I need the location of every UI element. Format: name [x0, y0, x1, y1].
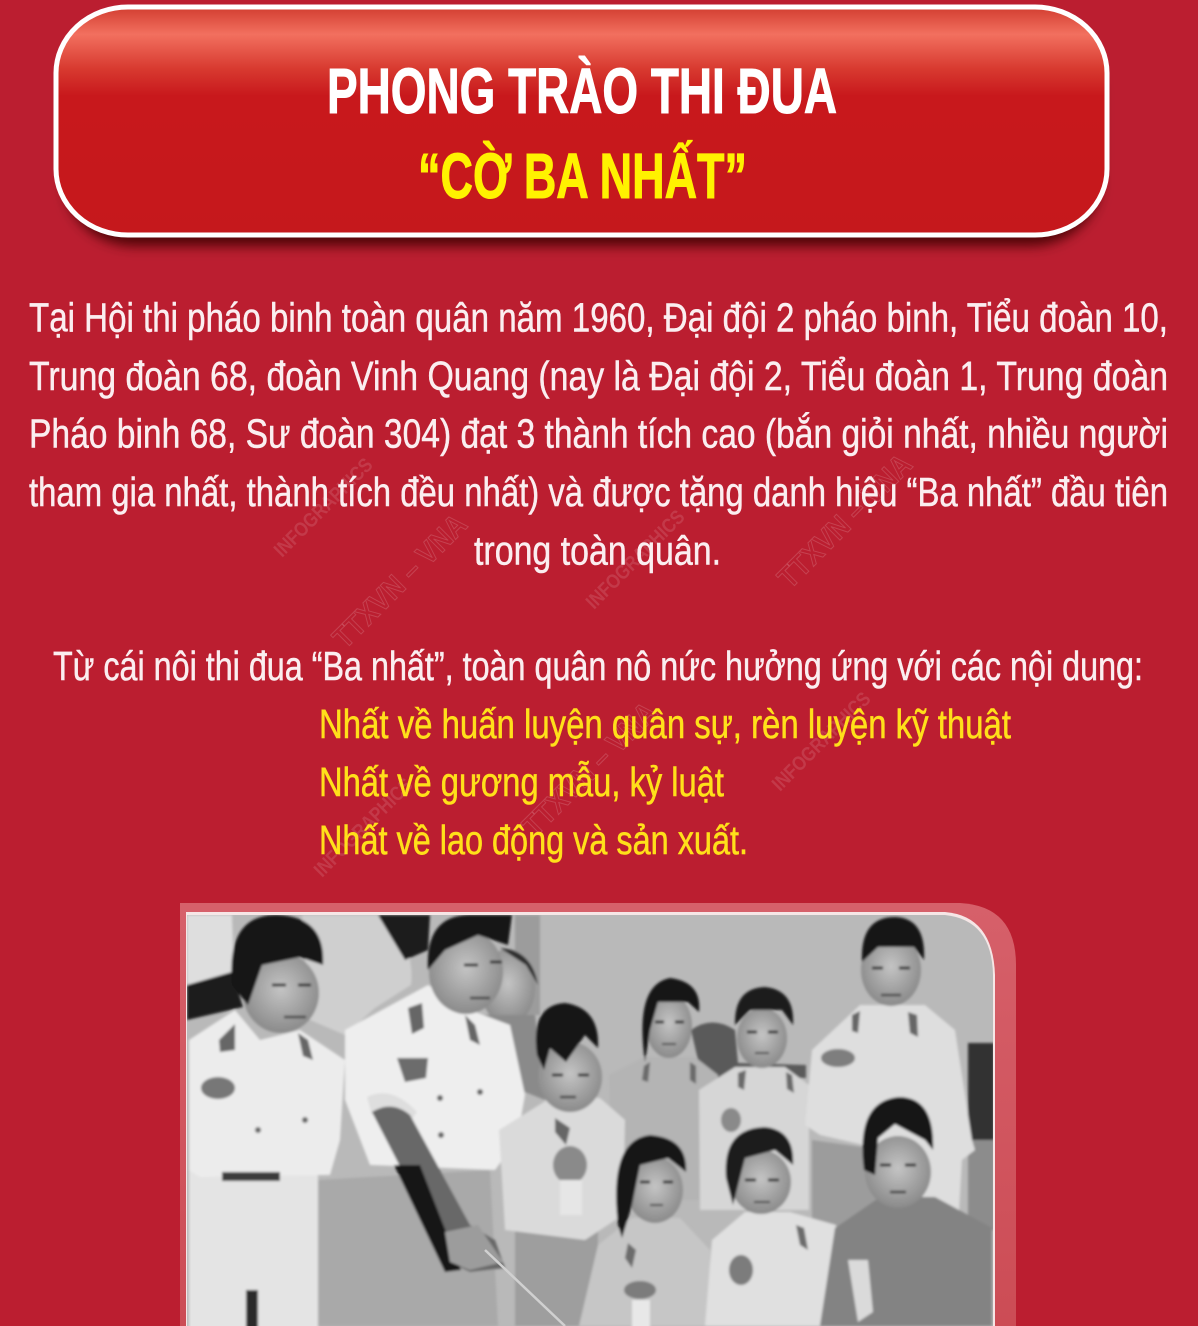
man back row centre	[626, 1054, 720, 1172]
man back row right	[699, 1067, 809, 1210]
yellow list of contents: Nhất về gương mẫu, kỷ luật	[319, 759, 724, 805]
yellow list of contents: Nhất về huấn luyện quân sự, rèn luyện kỹ thuật	[319, 701, 1011, 747]
outlined agency watermarks: TTXVN – VNA	[517, 696, 664, 843]
black and white photo of soldiers	[187, 915, 994, 1326]
watermarks	[270, 454, 875, 882]
outlined agency watermarks: TTXVN – VNA	[327, 508, 474, 655]
watermarks: INFOGRAPHICS	[270, 454, 377, 562]
foliage behind the back row	[691, 1022, 806, 1078]
outlined agency watermarks: TTXVN – VNA	[772, 448, 919, 595]
watermarks: INFOGRAPHICS	[310, 774, 417, 882]
wall and right side dark area	[968, 1043, 994, 1143]
watermarks: INFOGRAPHICS	[582, 506, 689, 614]
intro paragraph: trong toàn quân.	[474, 528, 721, 574]
title line 1: PHONG TRÀO THI ĐUA	[327, 55, 837, 127]
outlined agency watermarks	[327, 448, 919, 843]
title banner	[56, 7, 1107, 246]
yellow list of contents	[319, 701, 1011, 863]
seated man	[705, 1212, 836, 1326]
yellow list of contents: Nhất về lao động và sản xuất.	[319, 817, 748, 863]
pointing man	[318, 1170, 498, 1326]
title line 2: “CỜ BA NHẤT”	[418, 140, 747, 212]
watermarks: INFOGRAPHICS	[768, 688, 875, 796]
background crowd	[187, 915, 234, 985]
tall man right	[812, 1140, 883, 1226]
seated woman	[579, 1218, 710, 1326]
woman behind	[485, 950, 533, 1016]
pointer stick	[485, 1250, 565, 1326]
photo frame	[180, 903, 1016, 1326]
man in the middle	[515, 1230, 598, 1326]
front right man	[820, 1197, 992, 1326]
intro paragraph	[29, 294, 1168, 574]
man at left	[189, 1170, 318, 1326]
